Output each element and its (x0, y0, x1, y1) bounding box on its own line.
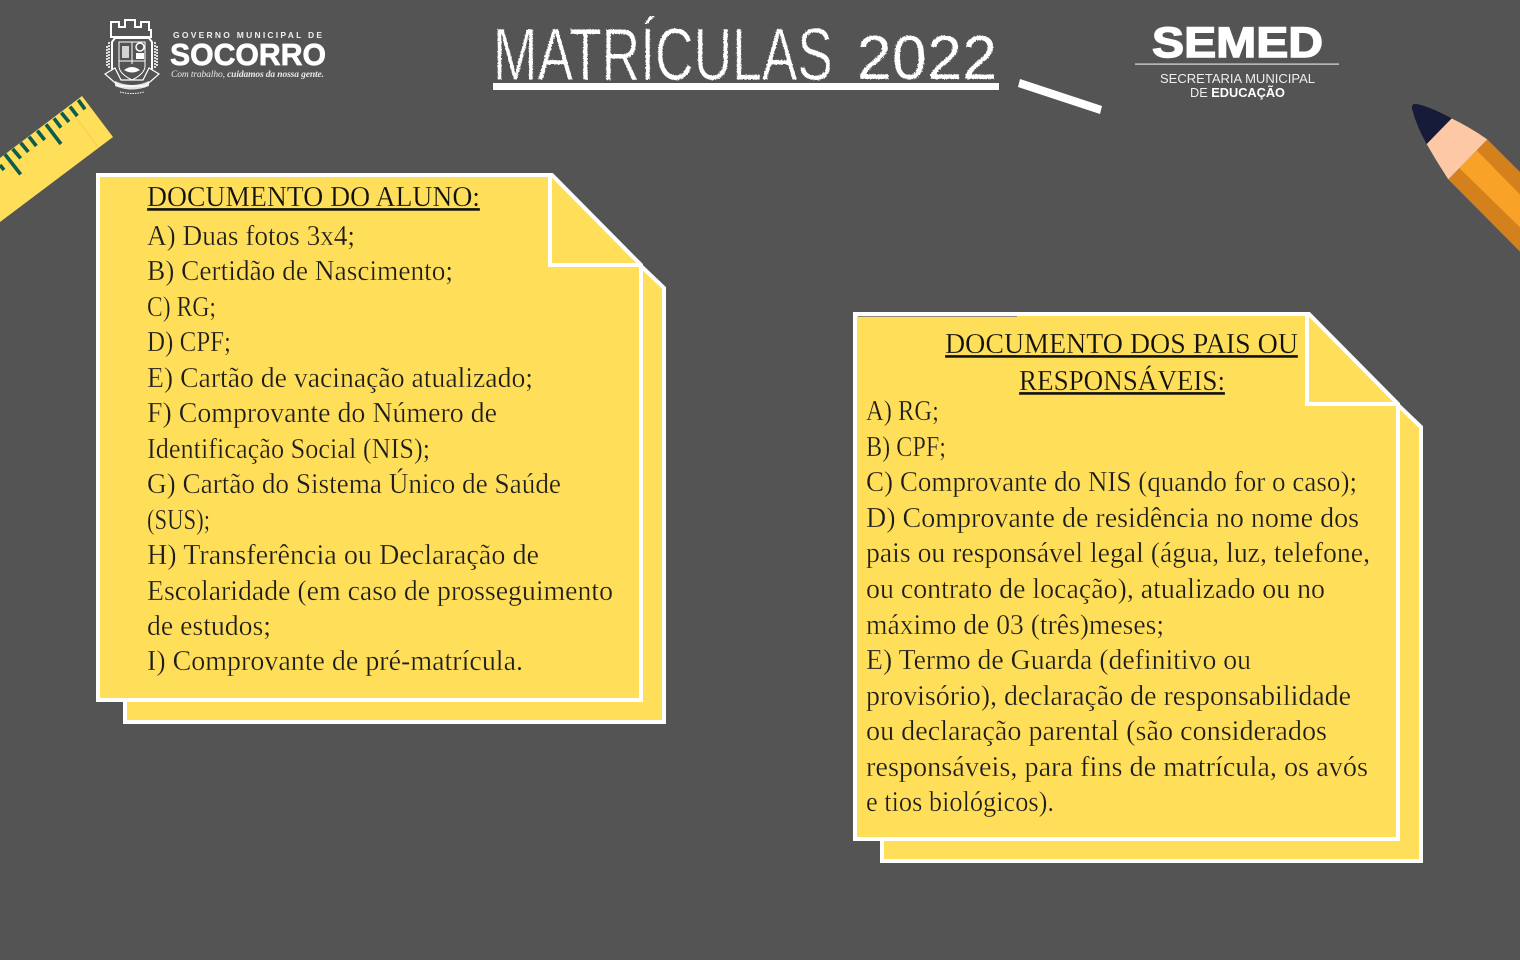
logo: Governo Municipal de Socorro (105, 20, 326, 94)
document list: I) Comprovante de pré-matrícula. (147, 646, 523, 677)
document list: E) Termo de Guarda (definitivo ou (866, 645, 1251, 676)
heading: DOCUMENTO DO ALUNO: (147, 181, 480, 213)
back sheet (125, 265, 664, 722)
document list: de estudos; (147, 611, 271, 642)
heading text: MATRÍCULAS (493, 13, 833, 96)
document list: provisório), declaração de responsabilidade (866, 681, 1351, 712)
document list (866, 396, 1370, 818)
icon: municipal crest (105, 20, 159, 94)
back sheet (882, 404, 1421, 861)
document list: Identificação Social (NIS); (147, 434, 430, 465)
document list: C) Comprovante do NIS (quando for o caso); (866, 467, 1357, 498)
text: governo municipal de: GOVERNO MUNICIPAL DE (173, 30, 322, 40)
document list: F) Comprovante do Número de (147, 398, 497, 429)
document list: pais ou responsável legal (água, luz, telefone, (866, 538, 1370, 569)
document list: Escolaridade (em caso de prosseguimento (147, 576, 613, 607)
heading text: 2022 (857, 24, 997, 93)
panel: documento dos pais ou responsaveis (855, 314, 1421, 861)
text: Socorro: SOCORRO (170, 37, 326, 72)
document list: D) CPF; (147, 327, 231, 358)
document list: B) CPF; (866, 432, 946, 463)
icon: ruler (0, 96, 113, 222)
document list: responsáveis, para fins de matrícula, os avós (866, 752, 1368, 783)
text: slogan: Com trabalho, cuidamos da nossa gente. (171, 70, 324, 80)
folded corner (1307, 314, 1398, 404)
panel: documento do aluno (98, 175, 664, 722)
heading: RESPONSÁVEIS: (1019, 364, 1225, 397)
document list: ou contrato de locação), atualizado ou no (866, 574, 1325, 605)
logo: SEMED (1135, 19, 1339, 100)
document list: e tios biológicos). (866, 787, 1054, 818)
document list (147, 221, 613, 677)
heading: DOCUMENTO DOS PAIS OU (945, 328, 1298, 360)
document list: ou declaração parental (são considerados (866, 716, 1327, 747)
document list: máximo de 03 (três)meses; (866, 610, 1164, 641)
text: de educacao: DE EDUCAÇÃO (1190, 85, 1285, 100)
document list: H) Transferência ou Declaração de (147, 540, 539, 571)
document list: A) Duas fotos 3x4; (147, 221, 355, 252)
front sheet (98, 175, 641, 700)
chalk stick (1018, 79, 1102, 114)
icon: pencil (1412, 104, 1520, 252)
front sheet (855, 314, 1398, 839)
document list: B) Certidão de Nascimento; (147, 256, 453, 287)
heading (945, 328, 1298, 397)
document list: C) RG; (147, 292, 216, 323)
title underline (493, 83, 999, 90)
document list: A) RG; (866, 396, 939, 427)
title (493, 13, 999, 96)
text: secretaria municipal: SECRETARIA MUNICIPAL (1160, 72, 1315, 86)
document list: G) Cartão do Sistema Único de Saúde (147, 469, 561, 500)
text: SEMED: SEMED (1152, 19, 1323, 67)
folded corner (550, 175, 641, 265)
document list: E) Cartão de vacinação atualizado; (147, 363, 533, 394)
document list: (SUS); (147, 505, 210, 536)
document list: D) Comprovante de residência no nome dos (866, 503, 1359, 534)
